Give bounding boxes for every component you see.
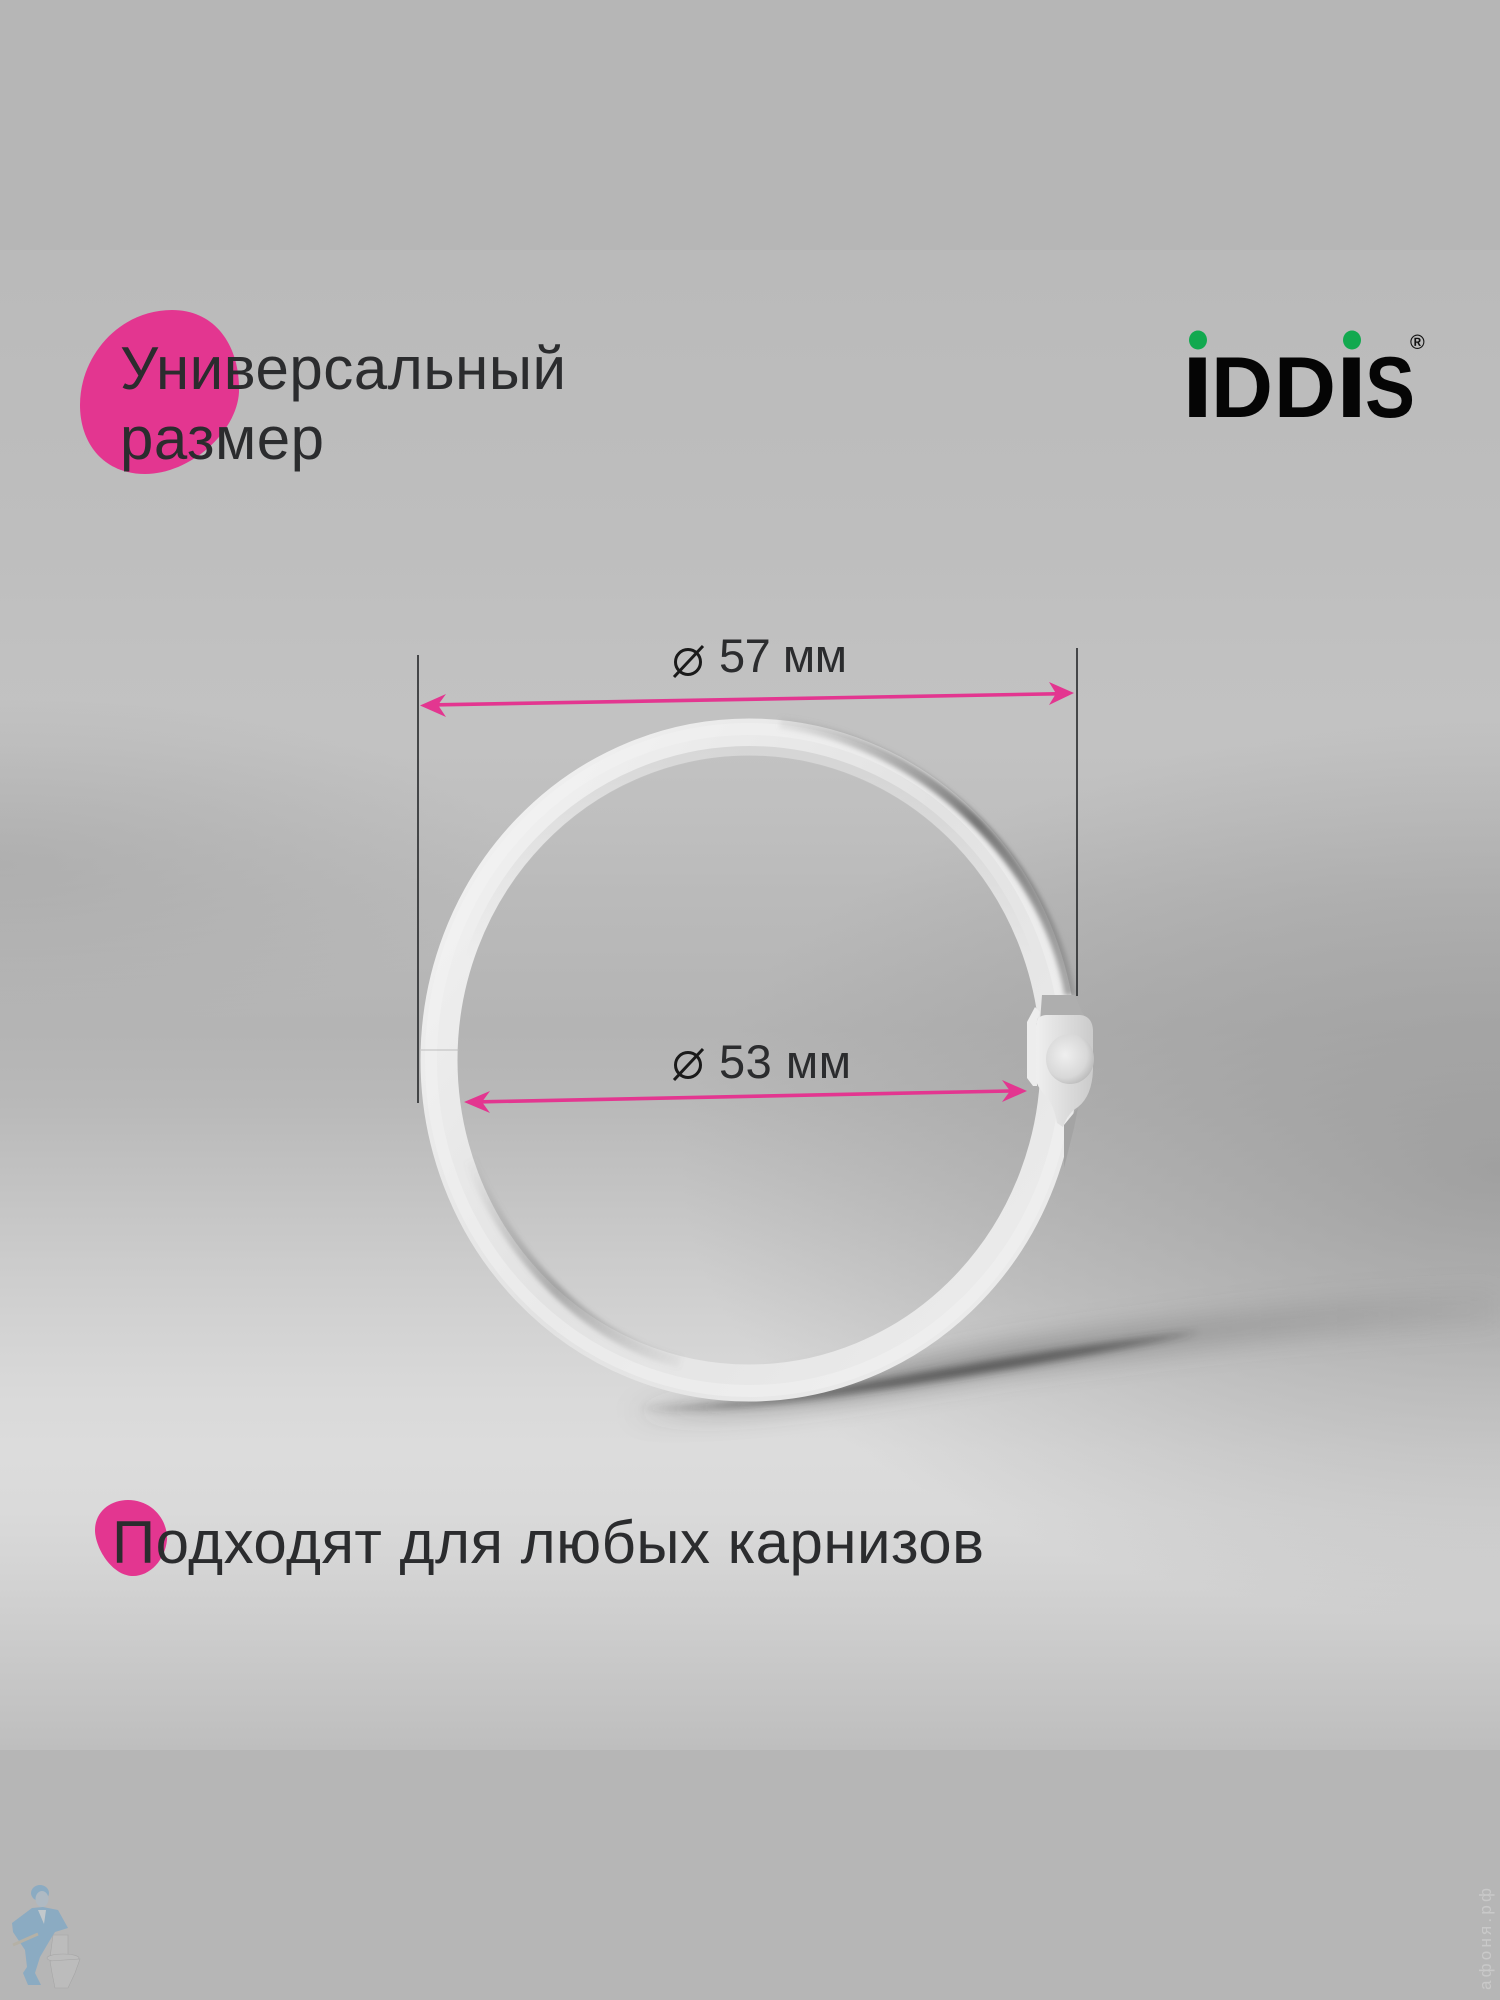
plumber hair — [31, 1885, 49, 1901]
icon: diameter symbol — [674, 646, 703, 677]
toilet — [47, 1935, 80, 1988]
clasp neck — [1040, 995, 1090, 1024]
ring shadow on floor — [630, 1290, 1500, 1412]
logo: IDDIS — [1182, 330, 1425, 436]
plumber figure — [12, 1907, 68, 1985]
ring — [421, 723, 1070, 1391]
ring shade: upper right outer edge — [780, 723, 1070, 995]
clasp dome — [1046, 1034, 1094, 1084]
pink blob behind caption — [95, 1500, 167, 1576]
ring seam — [421, 1049, 459, 1051]
arrow: outer diameter 57 mm — [420, 682, 1074, 717]
plumber wrench — [13, 1934, 38, 1945]
arrow: inner diameter 53 mm — [464, 1080, 1027, 1113]
logo wordmark: I — [1336, 340, 1368, 436]
logo wordmark: I — [1182, 340, 1214, 436]
watermark: site name: афоня.рф — [1476, 1888, 1495, 1990]
plumber shirt — [38, 1910, 46, 1924]
clasp lower tail shade — [1064, 1108, 1078, 1168]
clasp left strip — [1027, 1007, 1040, 1086]
pink blob behind heading — [80, 310, 239, 474]
dimension guide lines — [418, 648, 1077, 1103]
logo wordmark: D — [1211, 340, 1273, 436]
registered mark: ® — [1410, 332, 1425, 354]
heading: universal size: Универсальный — [120, 335, 566, 402]
heading: universal size: размер — [120, 405, 324, 472]
logo wordmark: S — [1365, 340, 1415, 436]
icon: diameter symbol — [674, 1049, 703, 1080]
ring shade: inner surface fades on top — [453, 751, 1045, 1369]
clasp — [1027, 995, 1094, 1168]
logo dots — [1189, 330, 1361, 350]
ring highlight: outer surface — [431, 729, 1067, 1391]
label: outer diameter: 57 мм — [719, 629, 847, 682]
ring shade: lower left inner edge — [470, 1160, 680, 1362]
watermark: plumber with toilet — [12, 1885, 80, 1988]
plumber face — [36, 1891, 48, 1907]
clasp plate — [1036, 1015, 1093, 1127]
label: inner diameter: 53 мм — [719, 1035, 851, 1088]
caption: fits any rods: Подходят для любых карнизов — [112, 1509, 984, 1576]
logo wordmark: D — [1274, 340, 1336, 436]
